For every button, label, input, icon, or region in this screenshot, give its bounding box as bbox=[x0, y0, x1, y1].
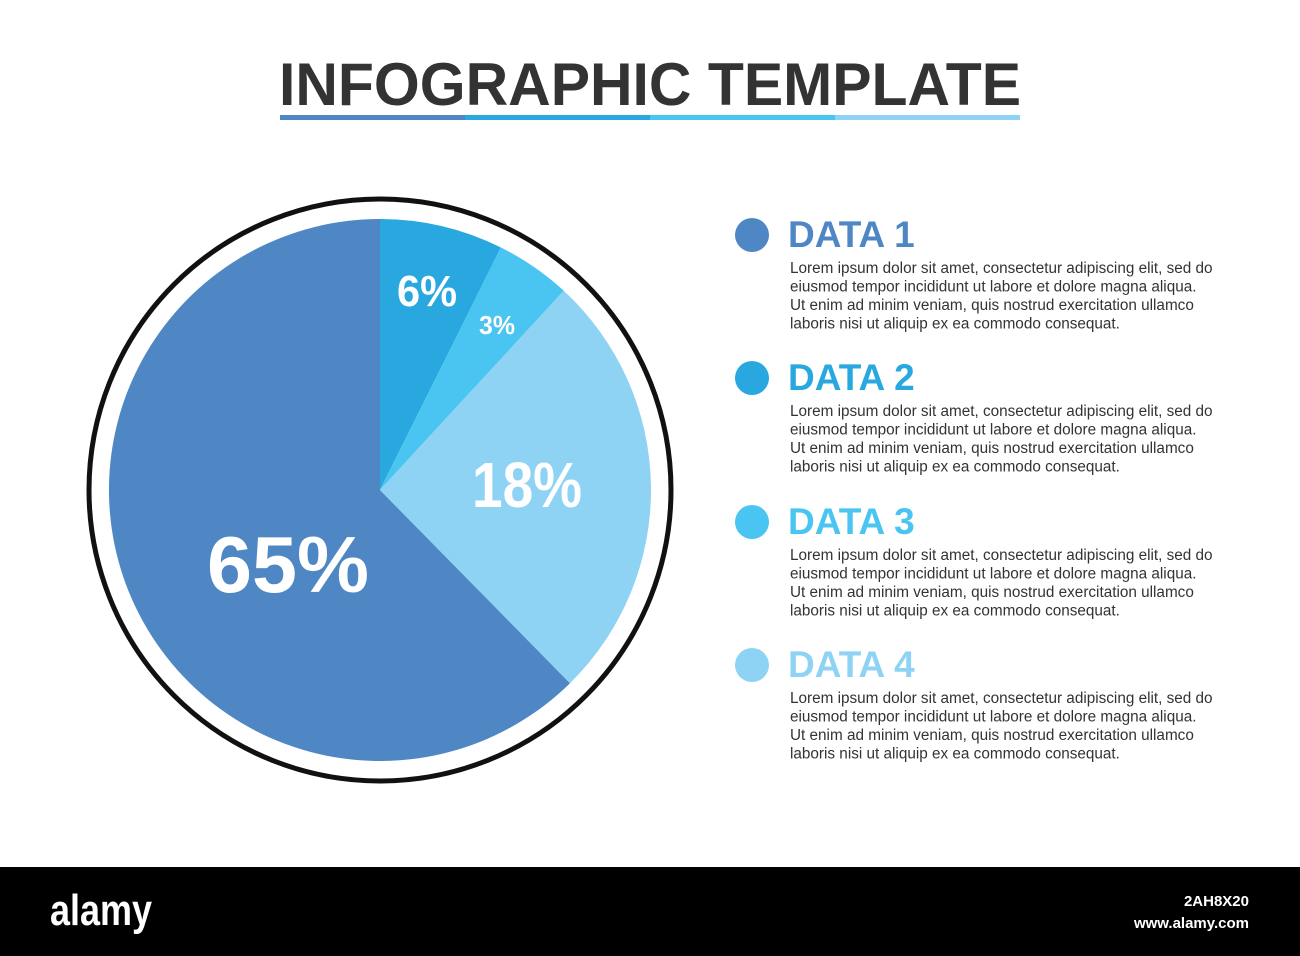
item: data 3: eiusmod tempor incididunt ut labore et dolore magna aliqua. bbox=[790, 566, 1196, 582]
footer bar bbox=[0, 867, 1300, 956]
slice: 65% bbox=[109, 219, 570, 761]
item: data 4: DATA 4 bbox=[788, 644, 915, 685]
item: data 1: Lorem ipsum dolor sit amet, consectetur adipiscing elit, sed do bbox=[790, 260, 1213, 277]
footer bar: alamy bbox=[50, 886, 152, 935]
item: data 1: eiusmod tempor incididunt ut labore et dolore magna aliqua. bbox=[790, 278, 1196, 296]
item: data 1: DATA 1 bbox=[788, 214, 915, 255]
pie chart bbox=[89, 199, 671, 781]
item: data 3: laboris nisi ut aliquip ex ea commodo consequat. bbox=[790, 602, 1120, 620]
item: data 3 bbox=[735, 501, 1213, 620]
slice: 3% bbox=[380, 248, 564, 490]
item: data 4: Ut enim ad minim veniam, quis nostrud exercitation ullamco bbox=[790, 727, 1194, 744]
item: data 3: Ut enim ad minim veniam, quis nostrud exercitation ullamco bbox=[790, 584, 1194, 601]
slice: 18% bbox=[380, 291, 651, 683]
item: data 4: eiusmod tempor incididunt ut labore et dolore magna aliqua. bbox=[790, 708, 1196, 726]
item: data 2: eiusmod tempor incididunt ut labore et dolore magna aliqua. bbox=[790, 422, 1196, 438]
item: data 2 bbox=[735, 357, 1213, 476]
item: data 4: Lorem ipsum dolor sit amet, consectetur adipiscing elit, sed do bbox=[790, 690, 1213, 707]
footer bar: 2AH8X20 bbox=[1184, 893, 1249, 910]
data list bbox=[735, 214, 1213, 762]
title: INFOGRAPHIC TEMPLATE bbox=[279, 51, 1021, 118]
item: data 4: laboris nisi ut aliquip ex ea commodo consequat. bbox=[790, 746, 1120, 762]
label 18%: 18% bbox=[472, 449, 582, 521]
item: data 1 bbox=[735, 214, 1213, 332]
label 6%: 6% bbox=[397, 267, 457, 316]
slice: 6% bbox=[380, 219, 501, 490]
item: data 2: DATA 2 bbox=[788, 357, 915, 398]
item: data 4 bbox=[735, 644, 1213, 762]
item: data 2: laboris nisi ut aliquip ex ea commodo consequat. bbox=[790, 458, 1120, 476]
item: data 1: laboris nisi ut aliquip ex ea commodo consequat. bbox=[790, 316, 1120, 332]
item: data 3: DATA 3 bbox=[788, 501, 915, 542]
item: data 2: Lorem ipsum dolor sit amet, consectetur adipiscing elit, sed do bbox=[790, 403, 1213, 420]
footer bar: www.alamy.com bbox=[1133, 915, 1249, 932]
label 3%: 3% bbox=[479, 310, 515, 340]
item: data 1: Ut enim ad minim veniam, quis nostrud exercitation ullamco bbox=[790, 297, 1194, 314]
item: data 3: Lorem ipsum dolor sit amet, consectetur adipiscing elit, sed do bbox=[790, 547, 1213, 564]
item: data 2: Ut enim ad minim veniam, quis nostrud exercitation ullamco bbox=[790, 440, 1194, 457]
label 65%: 65% bbox=[207, 520, 369, 609]
